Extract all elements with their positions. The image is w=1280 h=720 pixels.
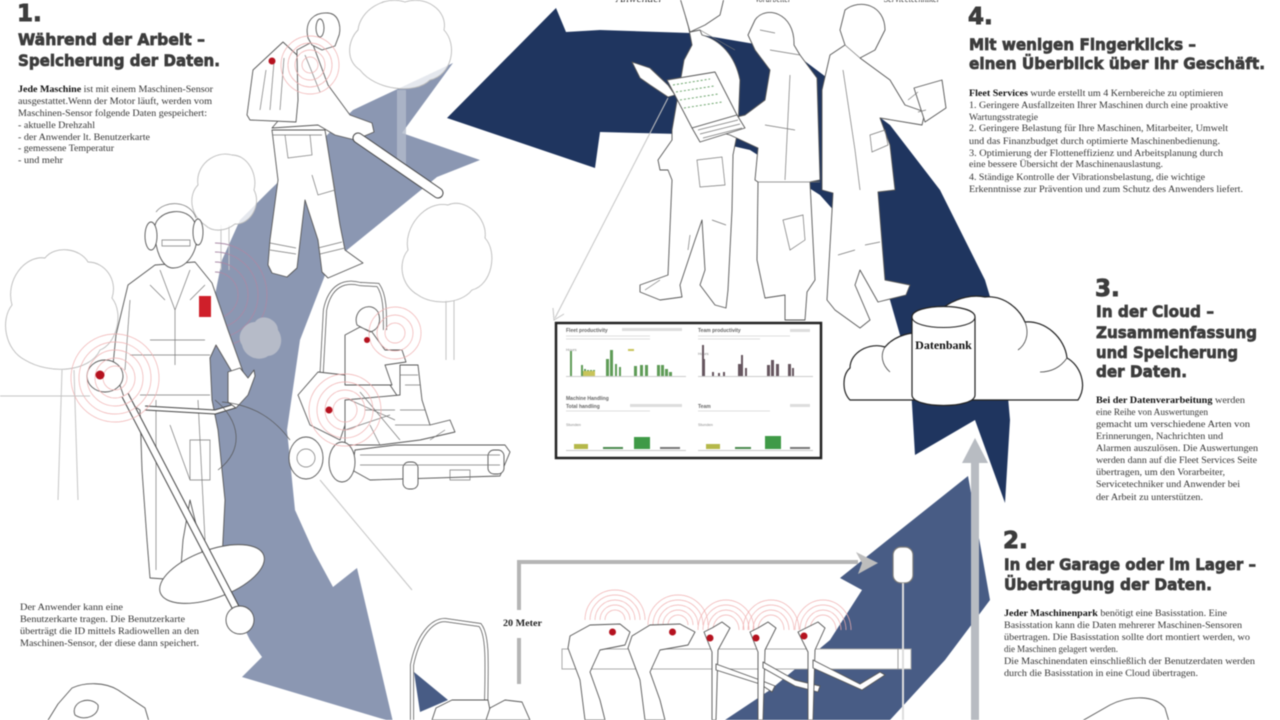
worker head bbox=[155, 212, 197, 268]
sensor dots bbox=[609, 628, 808, 642]
figure: Anwender bbox=[632, 0, 740, 308]
head bbox=[307, 13, 340, 50]
backpack bbox=[247, 42, 298, 122]
body text: 2. Geringere Belastung für Ihre Maschinen, Mitarbeiter, Umwelt bbox=[969, 123, 1229, 133]
screen content bbox=[673, 79, 722, 108]
mower seat area bbox=[432, 700, 492, 720]
body text: durch die Basisstation in eine Cloud übertragen. bbox=[1004, 668, 1198, 678]
body bbox=[822, 4, 925, 328]
body text: - der Anwender lt. Benutzerkarte bbox=[18, 132, 150, 142]
cable bbox=[215, 400, 290, 470]
hand bbox=[228, 368, 255, 408]
body text bbox=[1096, 395, 1259, 502]
harness details bbox=[125, 270, 210, 570]
number: 2. bbox=[1003, 528, 1028, 554]
roll bar bbox=[412, 620, 487, 720]
sensor dot bbox=[96, 370, 104, 380]
body text: Basisstation kann die Daten mehrerer Maschinen-Sensoren bbox=[1004, 620, 1243, 630]
grey upload arrow to cloud bbox=[962, 438, 988, 720]
body text: die Maschinen gelagert werden. bbox=[1004, 644, 1118, 654]
number: 1. bbox=[17, 1, 42, 27]
body bbox=[640, 0, 740, 308]
body text bbox=[1004, 608, 1256, 678]
section 2 text bbox=[1003, 528, 1256, 678]
panel: team handling bbox=[698, 404, 813, 451]
heading bbox=[1096, 302, 1257, 381]
ear muffs bbox=[145, 204, 203, 250]
mower details bbox=[345, 375, 500, 480]
engine and rear body bbox=[298, 372, 400, 440]
signal rings bbox=[281, 36, 339, 94]
heading: einen Überblick über Ihr Geschäft. bbox=[969, 54, 1265, 73]
body text: übertragen, um den Vorarbeiter, bbox=[1096, 467, 1225, 477]
panel: machine handling: Total handling bbox=[566, 404, 600, 410]
blower machine one bbox=[568, 624, 630, 720]
body text: der Arbeit zu unterstützen. bbox=[1096, 492, 1203, 502]
heading: Mit wenigen Fingerklicks – bbox=[969, 35, 1196, 54]
user card note: überträgt die ID mittels Radiowellen an den bbox=[20, 626, 200, 636]
cutting deck bbox=[352, 445, 510, 480]
database label: Datenbank bbox=[915, 338, 972, 352]
body text: 4. Ständige Kontrolle der Vibrationsbelastung, die wichtige bbox=[969, 172, 1205, 182]
tablet bbox=[914, 80, 946, 122]
role labels bbox=[615, 0, 940, 4]
blower tube bbox=[358, 138, 438, 193]
panel: team handling: Team bbox=[698, 404, 711, 410]
trimmer disc bbox=[152, 533, 272, 615]
body text: 3. Optimierung der Flotteneffizienz und Arbeitsplanung durch bbox=[969, 148, 1224, 158]
panel: team productivity: Hours bbox=[698, 351, 709, 356]
head and hair bbox=[680, 0, 724, 32]
heading: In der Garage oder im Lager – bbox=[1004, 555, 1256, 574]
body text: Erinnerungen, Nachrichten und bbox=[1096, 431, 1224, 441]
panel: team productivity bbox=[698, 328, 813, 377]
clothing details bbox=[838, 45, 888, 255]
body text: eine bessere Übersicht der Maschinenauslastung. bbox=[969, 159, 1163, 169]
trimmer machine four bbox=[750, 622, 820, 720]
blower machine two bbox=[628, 624, 695, 720]
trimmer shaft bbox=[125, 395, 238, 612]
smoke cloud bbox=[240, 317, 281, 359]
torso and arm bbox=[272, 42, 374, 140]
sensor dot bbox=[268, 58, 276, 64]
body text bbox=[18, 84, 213, 165]
frame bbox=[556, 323, 821, 458]
body text: Erkenntnisse zur Prävention und zum Schutz des Anwenders liefert. bbox=[969, 184, 1243, 194]
panel: fleet productivity: Hours bbox=[566, 347, 577, 352]
body bbox=[712, 12, 820, 320]
panel: team handling: Stunden bbox=[698, 422, 713, 427]
panel: machine handling bbox=[566, 396, 686, 451]
rider bbox=[345, 307, 406, 385]
heading: Während der Arbeit – bbox=[18, 30, 205, 49]
section 4 text bbox=[968, 4, 1265, 194]
front deck wheels bbox=[403, 462, 418, 489]
heading bbox=[969, 35, 1265, 73]
tree: small centre left bbox=[192, 154, 257, 270]
figure: bottom right machine bbox=[1075, 698, 1170, 720]
body text: Jeder Maschinenpark benötigt eine Basisstation. Eine bbox=[1004, 608, 1227, 618]
tree: top behind blower bbox=[350, 0, 452, 165]
tree: far left bbox=[6, 250, 118, 500]
arrow: steel blue arrow from garage to cloud bbox=[725, 476, 990, 720]
body text: - und mehr bbox=[18, 155, 63, 165]
mower engine bbox=[486, 700, 530, 720]
body text: Servicetechniker und Anwender bei bbox=[1096, 479, 1241, 489]
trees bbox=[6, 0, 492, 500]
body text: Jede Maschine ist mit einem Maschinen-Sensor bbox=[18, 84, 213, 94]
figure: Vorarbeiter bbox=[712, 12, 820, 320]
number: 4. bbox=[968, 4, 993, 30]
rear wheels bbox=[289, 437, 323, 479]
body text: Bei der Datenverarbeitung werden bbox=[1096, 395, 1246, 405]
signal rings upper bbox=[369, 307, 421, 359]
distance label: 20 Meter bbox=[503, 619, 543, 629]
body text: - aktuelle Drehzahl bbox=[18, 120, 96, 130]
red signal rings at worker's card bbox=[215, 243, 267, 347]
heading: In der Cloud – bbox=[1096, 302, 1214, 321]
body text: werden dann auf die Fleet Services Seite bbox=[1096, 455, 1257, 465]
heading: Speicherung der Daten. bbox=[18, 51, 220, 70]
body text: Alarmen auszulösen. Die Auswertungen bbox=[1096, 443, 1259, 453]
section 3 text bbox=[1095, 276, 1259, 502]
panel: machine handling: Machine Handling bbox=[566, 396, 609, 402]
machine rack with tools bbox=[562, 590, 911, 720]
roll bar bbox=[321, 283, 385, 385]
trimmer machine three bbox=[704, 622, 775, 720]
clothing details bbox=[758, 30, 820, 250]
rack bar bbox=[562, 649, 911, 669]
figure: Servicetechniker bbox=[822, 4, 946, 328]
body text: Maschinen-Sensor folgende Daten gespeichert: bbox=[18, 108, 207, 118]
line to base bbox=[0, 396, 412, 590]
body text: Die Maschinendaten einschließlich der Benutzerdaten werden bbox=[1004, 656, 1256, 666]
trimmer engine bbox=[87, 360, 123, 392]
thin line from user to dashboard bbox=[553, 98, 668, 320]
heading bbox=[18, 30, 220, 70]
signal rings lower bbox=[309, 374, 381, 446]
panel: machine handling: Stunden bbox=[566, 422, 581, 427]
patch of steel blue behind the bottom mower bbox=[414, 672, 448, 712]
user card note bbox=[20, 602, 200, 648]
figure: ride-on mower bbox=[289, 283, 510, 489]
red user card bbox=[199, 296, 211, 317]
worker body bbox=[113, 262, 246, 580]
figure: bottom mower bbox=[412, 620, 530, 720]
heading: Zusammenfassung bbox=[1096, 323, 1257, 342]
body text: Fleet Services wurde erstellt um 4 Kernbereiche zu optimieren bbox=[969, 88, 1224, 98]
raised arm bbox=[632, 62, 675, 97]
figure: worker with backpack blower bbox=[247, 13, 438, 278]
panel: fleet productivity bbox=[566, 328, 686, 377]
body text bbox=[969, 88, 1243, 194]
trimmer cutting head bbox=[226, 606, 254, 634]
arrow: dark cycle arrow from cloud to user bbox=[447, 8, 1010, 503]
ear protection bbox=[316, 19, 324, 37]
laptop with screen bbox=[667, 72, 745, 142]
number: 3. bbox=[1095, 276, 1120, 302]
user card note: Maschinen-Sensor, der diese dann speichert. bbox=[20, 638, 199, 648]
clothing details bbox=[645, 30, 735, 290]
blower worker trousers bbox=[268, 130, 363, 278]
heading: und Speicherung bbox=[1096, 343, 1238, 362]
user card note: Benutzerkarte tragen. Die Benutzerkarte bbox=[20, 614, 185, 624]
base station bbox=[893, 547, 913, 720]
trimmer handle bar bbox=[145, 406, 235, 412]
mower body and steering bbox=[345, 365, 455, 445]
heading: Übertragung der Daten. bbox=[1004, 575, 1212, 594]
section 1 text bbox=[17, 1, 220, 165]
user card note: Der Anwender kann eine bbox=[20, 602, 123, 612]
figure: worker with string trimmer bbox=[0, 204, 412, 634]
dashboard screenshot bbox=[556, 323, 821, 458]
cloud with database bbox=[844, 296, 1082, 406]
signal rings at trimmer engine bbox=[71, 334, 159, 422]
figure: bottom left machine bbox=[45, 684, 150, 720]
clothing and pack details bbox=[260, 55, 345, 254]
tree: right of rider bbox=[402, 203, 492, 360]
panel: fleet productivity: Fleet productivity bbox=[566, 328, 608, 334]
signal rings over machines bbox=[585, 590, 851, 630]
hand on tablet bbox=[908, 92, 926, 112]
body text: übertragen. Die Basisstation sollte dort montiert werden, wo bbox=[1004, 632, 1251, 642]
trimmer machine five bbox=[798, 622, 885, 720]
cloud inner lines bbox=[882, 322, 1067, 372]
grey distance arrow with 20 Meter label bbox=[503, 552, 878, 684]
sensor dots bbox=[364, 337, 370, 343]
body text: ausgestattet.Wenn der Motor läuft, werden vom bbox=[18, 96, 212, 106]
heading: der Daten. bbox=[1096, 362, 1187, 381]
cloud bbox=[844, 296, 1082, 400]
database cylinder bbox=[912, 306, 975, 406]
body text: und das Finanzbudget durch optimierte Maschinenbedienung. bbox=[969, 136, 1220, 146]
arrow: light cycle arrow from work to garage bbox=[197, 63, 480, 720]
body text: 1. Geringere Ausfallzeiten Ihrer Maschinen durch eine proaktive bbox=[969, 100, 1228, 110]
panel: team productivity: Team productivity bbox=[698, 328, 741, 334]
heading bbox=[1004, 555, 1256, 594]
body text: eine Reihe von Auswertungen bbox=[1096, 407, 1209, 417]
body text: - gemessene Temperatur bbox=[18, 143, 114, 153]
body text: gemacht um verschiedene Arten von bbox=[1096, 419, 1251, 429]
body text: Wartungsstrategie bbox=[969, 112, 1038, 122]
